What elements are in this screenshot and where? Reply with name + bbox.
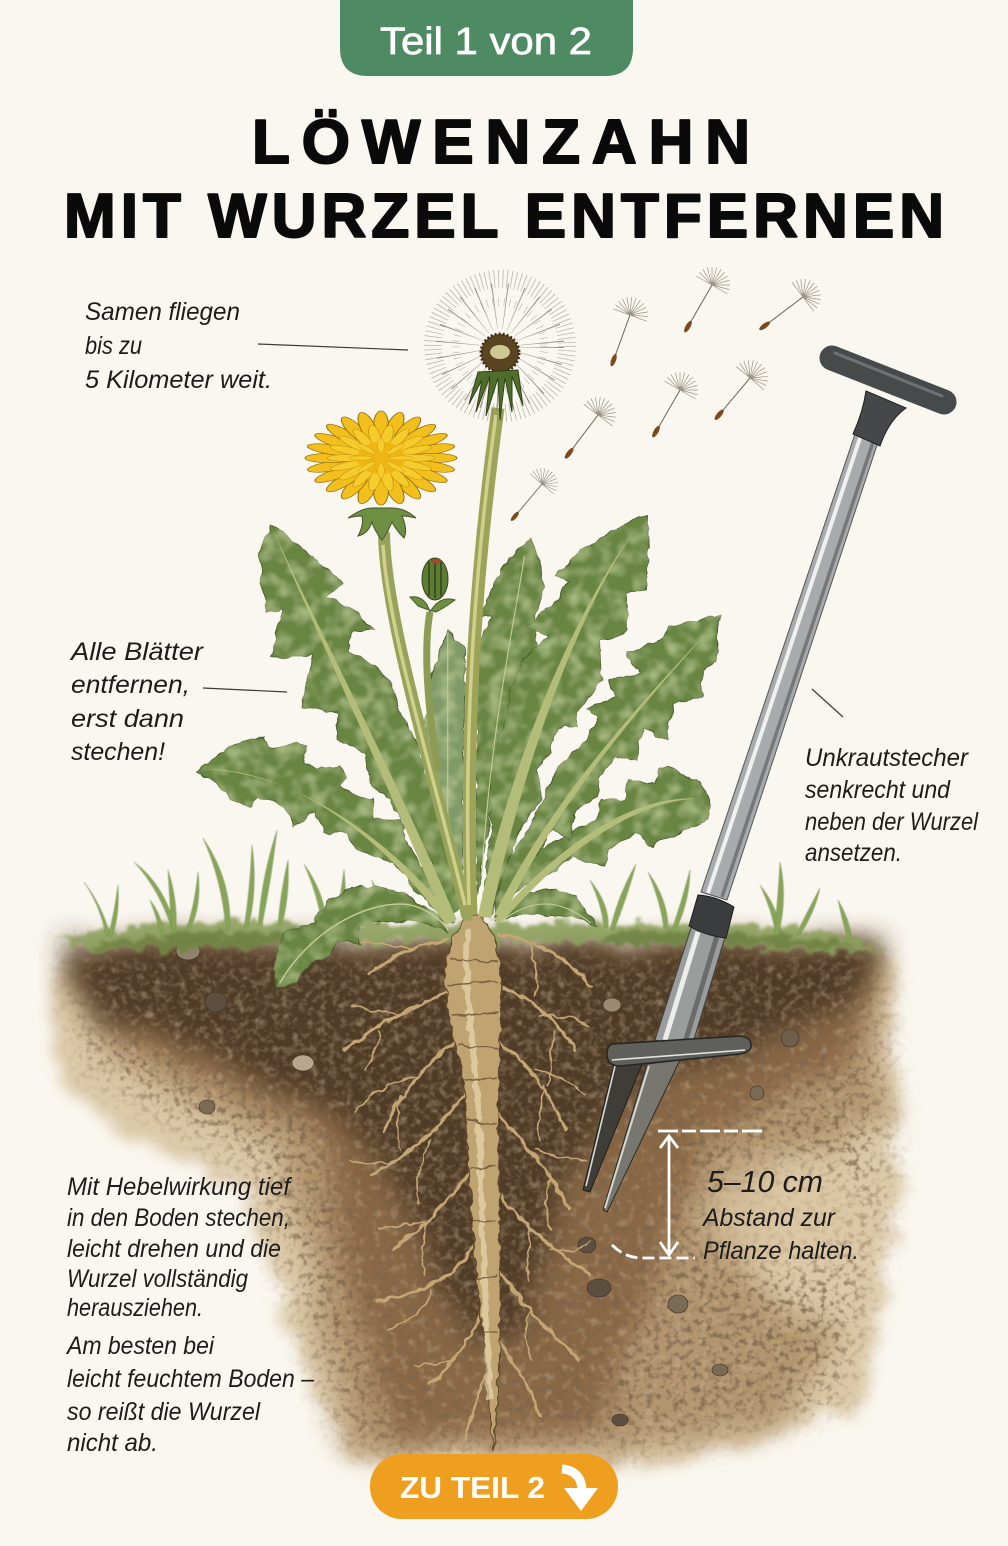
icon: curved arrow [562,1469,598,1511]
note: technique [65,1173,315,1457]
note: seeds [85,298,272,394]
note: distance [701,1164,859,1265]
note: leaves: erst dann [71,705,184,733]
note: leaves: Alle Blätter [69,638,205,666]
part badge: Teil 1 von 2 [380,21,592,63]
note: tool: senkrecht und [805,776,951,804]
taproot [445,915,501,1450]
next part button [370,1454,618,1519]
note: technique: nicht ab. [67,1429,158,1457]
note: tool: neben der Wurzel [805,808,979,836]
title: MIT WURZEL ENTFERNEN [64,182,944,251]
tool blades [583,1060,680,1212]
leaf: pale centre [426,630,466,900]
grip ring [689,895,734,938]
leaf midribs [200,526,713,925]
leaf: bottom left [273,886,448,990]
upper shaft [701,434,878,900]
leaf: upper right [480,515,649,916]
note: technique: Am besten bei [65,1332,215,1360]
leader lines [203,344,843,717]
note: technique: leicht drehen und die [67,1235,281,1263]
lateral roots [345,935,590,1440]
bud stem [427,612,438,770]
lower shaft [655,925,725,1049]
leaf: lower left [198,736,455,923]
note: distance: Abstand zur [701,1204,837,1232]
note: leaves: entfernen, [71,671,190,699]
note: leaves [69,638,205,766]
note: seeds: Samen fliegen [85,298,240,326]
bud [410,558,455,612]
next part button: ZU TEIL 2 [400,1470,545,1505]
note: technique: Mit Hebelwirkung tief [67,1173,293,1201]
soil cross-section [55,942,900,1465]
stem highlights [383,415,496,905]
note: technique: leicht feuchtem Boden – [67,1365,315,1393]
grass strip [58,830,888,952]
title [64,108,944,251]
foot plate [607,1036,751,1066]
note: technique: Wurzel vollständig [67,1265,248,1293]
part badge [340,0,633,76]
weed extractor tool [583,353,944,1212]
flower stem [384,535,467,915]
flying seeds [499,260,828,531]
distance marker [612,1131,762,1258]
seed head [433,279,567,420]
leaf: upper left [260,525,466,913]
note: tool: ansetzen. [805,839,902,867]
note: tool [805,744,979,867]
note: distance: Pflanze halten. [703,1237,859,1265]
note: distance: 5–10 cm [707,1164,823,1199]
pale patch behind distance label [705,1160,865,1270]
leaf: centre right [476,537,542,900]
note: seeds: 5 Kilometer weit. [85,366,272,394]
note: technique: so reißt die Wurzel [67,1398,261,1426]
leaf: lower right [494,766,710,920]
note: leaves: stechen! [71,738,165,766]
dandelion leaves [198,515,719,990]
seed head stem [469,408,498,915]
note: technique: herausziehen. [67,1294,203,1322]
yellow flower [305,411,457,540]
leaf: right [494,615,719,920]
note: tool: Unkrautstecher [805,744,970,772]
pebbles [176,942,799,1426]
leaf: low right [494,890,598,926]
title: LÖWENZAHN [252,108,750,177]
note: technique: in den Boden stechen, [67,1204,290,1232]
note: seeds: bis zu [85,332,142,360]
T-handle [832,353,944,446]
